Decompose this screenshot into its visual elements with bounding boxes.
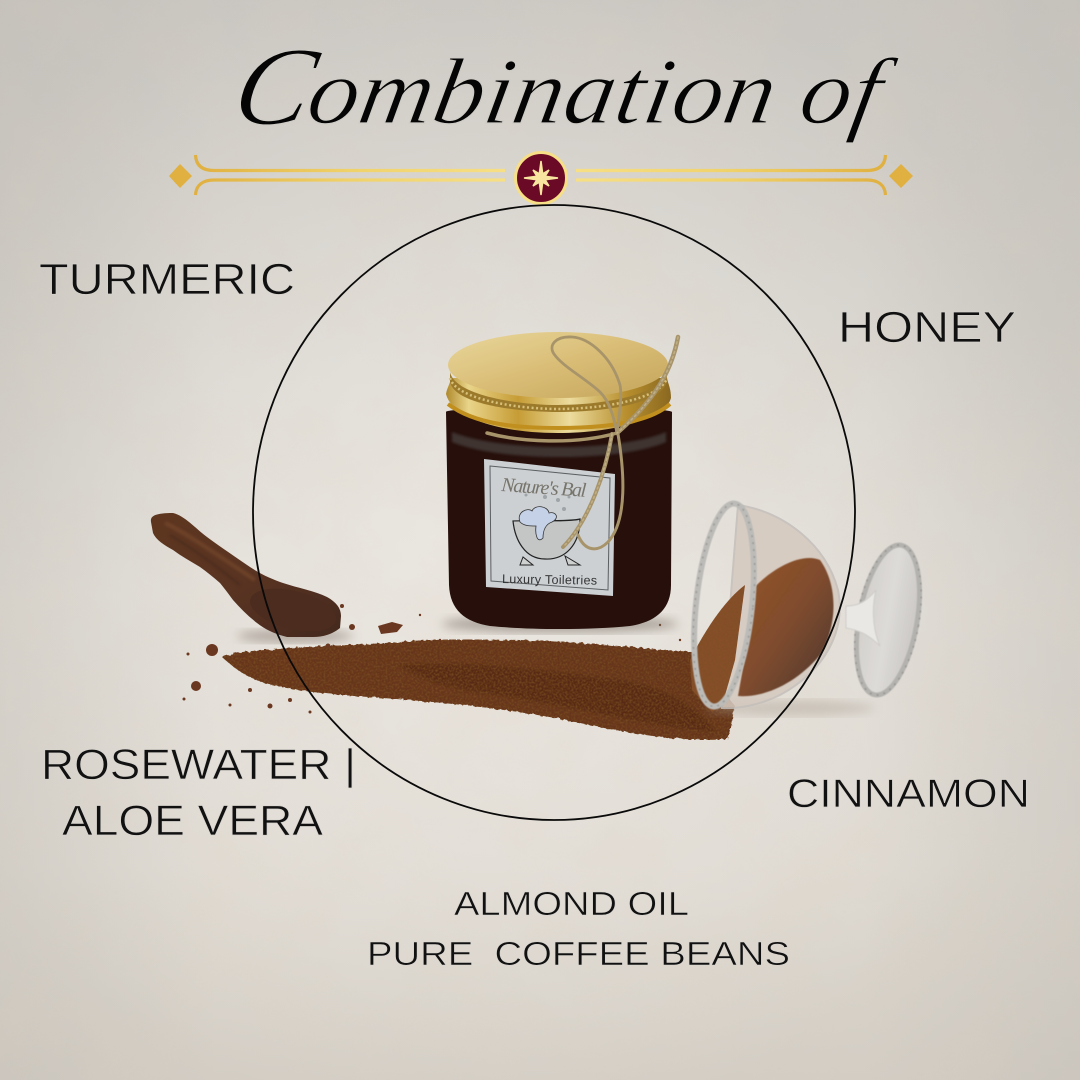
left gold diamond [169,164,192,188]
right double rule [576,155,886,195]
bowl rim [684,501,764,709]
ingredient: rosewater and aloe vera: ROSEWATER | [41,741,356,789]
left double rule [196,155,505,195]
powder inside bowl [738,558,834,696]
honey scrub jar [442,332,678,633]
gold lid [446,332,671,433]
wooden spoon [151,513,353,643]
glass coupe tipped on its side [684,501,932,716]
foot of glass [844,540,932,700]
jar body [446,408,672,629]
ingredients: almond oil and coffee beans: PURE COFFEE BEANS [367,935,790,972]
loose grains [182,604,681,714]
ingredient: cinnamon: CINNAMON [787,772,1030,816]
ornamental divider [169,152,913,204]
powder pouring from rim [690,585,745,712]
title: C [222,25,330,149]
label brand name: Nature's Bal [500,474,587,502]
thin outline circle [253,205,855,820]
title [222,25,903,149]
glass bowl [722,505,840,708]
right gold diamond [889,164,913,188]
ingredient: rosewater and aloe vera [41,741,356,845]
ingredient: rosewater and aloe vera: ALOE VERA [62,797,323,845]
coffee powder trail [182,604,735,740]
medallion with star [516,152,566,204]
twine bow [487,337,678,549]
ingredient: turmeric: TURMERIC [39,255,295,304]
ingredients: almond oil and coffee beans [367,885,790,972]
label tagline: Luxury Toiletries [502,572,597,588]
product label [484,459,615,596]
ingredients: almond oil and coffee beans: ALMOND OIL [454,885,689,922]
stem [846,590,880,646]
ingredient: honey: HONEY [838,303,1016,352]
title: ombination of [300,41,903,144]
bathtub icon [513,494,580,565]
